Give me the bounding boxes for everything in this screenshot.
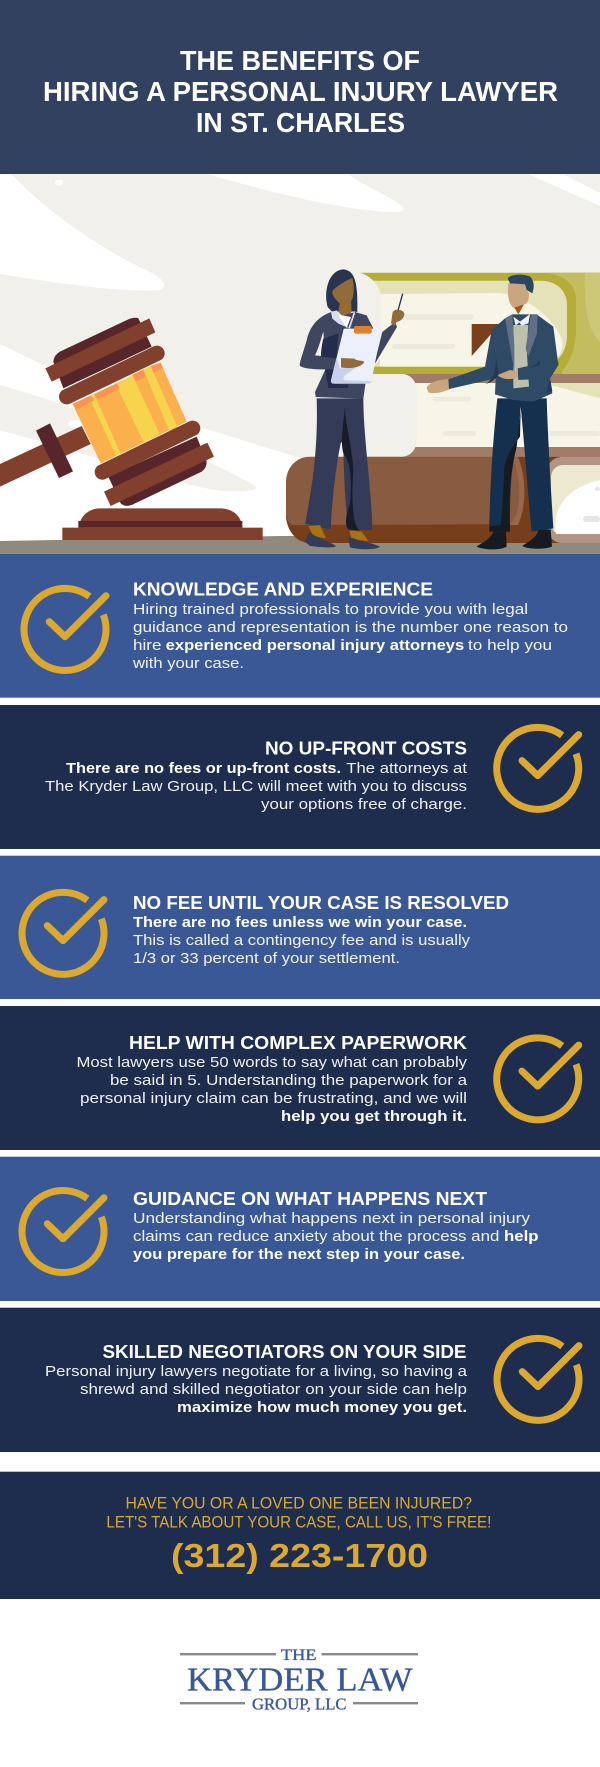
heading and text: Personal injury lawyers negotiate for a living, so having a [45,1363,468,1380]
logo: the kryder law group: GROUP, LLC [252,1694,346,1713]
heading and text: maximize how much money you get. [177,1399,467,1416]
heading and text: There are no fees or up-front costs. [66,760,341,777]
heading and text: hire [133,637,162,654]
title banner: IN ST. CHARLES [196,107,405,138]
heading and text: SKILLED NEGOTIATORS ON YOUR SIDE [102,1342,466,1362]
heading and text: be said in 5. Understanding the paperwork for a [110,1072,468,1089]
heading and text: Hiring trained professionals to provide you with legal [133,601,528,618]
call to action: LET'S TALK ABOUT YOUR CASE, CALL US, IT'S FREE! [106,1514,491,1532]
gavel [0,318,263,540]
woman lawyer with clipboard [300,269,404,549]
panel: guidance on what happens next [0,1157,600,1301]
call to action [0,1472,600,1599]
heading and text [45,1342,468,1416]
heading and text: with your case. [132,655,244,672]
heading and text: your options free of charge. [261,796,467,813]
icon: check mark [497,1338,579,1420]
panel: no fee until resolved [0,856,600,999]
panel: complex paperwork [0,1006,600,1150]
heading and text: you prepare for the next step in your case. [133,1246,465,1263]
heading and text: This is called a contingency fee and is usually [133,932,471,949]
title banner [0,0,600,174]
heading and text: help [504,1228,538,1245]
man lawyer gesturing [427,275,558,549]
heading and text: help you get through it. [281,1108,467,1125]
heading and text: Understanding what happens next in personal injury [133,1210,531,1227]
icon: check mark [22,1191,104,1273]
heading and text: to help you [468,637,552,654]
panel: knowledge and experience [0,554,600,698]
logo: the kryder law group: THE [281,1647,316,1664]
heading and text [133,1189,538,1263]
heading and text: The attorneys at [346,760,468,777]
call to action: (312) 223-1700 [171,1538,428,1575]
heading and text [132,580,568,672]
heading and text: personal injury claim can be frustrating, and we will [80,1090,467,1107]
title banner: THE BENEFITS OF [180,45,420,76]
heading and text: guidance and representation is the number one reason to [133,619,568,636]
heading and text [76,1033,468,1125]
heading and text: NO FEE UNTIL YOUR CASE IS RESOLVED [133,893,509,913]
heading and text [45,739,468,813]
heading and text: KNOWLEDGE AND EXPERIENCE [133,580,433,600]
icon: check mark [497,727,579,809]
heading and text: The Kryder Law Group, LLC will meet with you to discuss [45,778,467,795]
panel: no up-front costs [0,705,600,849]
heading and text: There are no fees unless we win your case. [133,914,467,931]
hero illustration [0,174,600,554]
heading and text: shrewd and skilled negotiator on your side can help [80,1381,467,1398]
heading and text: HELP WITH COMPLEX PAPERWORK [129,1033,467,1053]
heading and text: Most lawyers use 50 words to say what can probably [76,1054,468,1071]
heading and text: GUIDANCE ON WHAT HAPPENS NEXT [133,1189,487,1209]
heading and text [133,893,509,967]
heading and text: NO UP-FRONT COSTS [265,739,467,759]
icon: check mark [497,1038,579,1120]
heading and text: experienced personal injury attorneys [166,637,464,654]
icon: check mark [22,892,104,974]
logo: the kryder law group [180,1647,418,1713]
call to action: HAVE YOU OR A LOVED ONE BEEN INJURED? [126,1495,472,1513]
panel: skilled negotiators [0,1308,600,1452]
heading and text: claims can reduce anxiety about the process and [133,1228,499,1245]
icon: check mark [24,588,106,670]
logo: the kryder law group: KRYDER LAW [187,1662,413,1698]
book stack [286,273,600,543]
heading and text: 1/3 or 33 percent of your settlement. [133,950,400,967]
title banner: HIRING A PERSONAL INJURY LAWYER [43,76,558,107]
